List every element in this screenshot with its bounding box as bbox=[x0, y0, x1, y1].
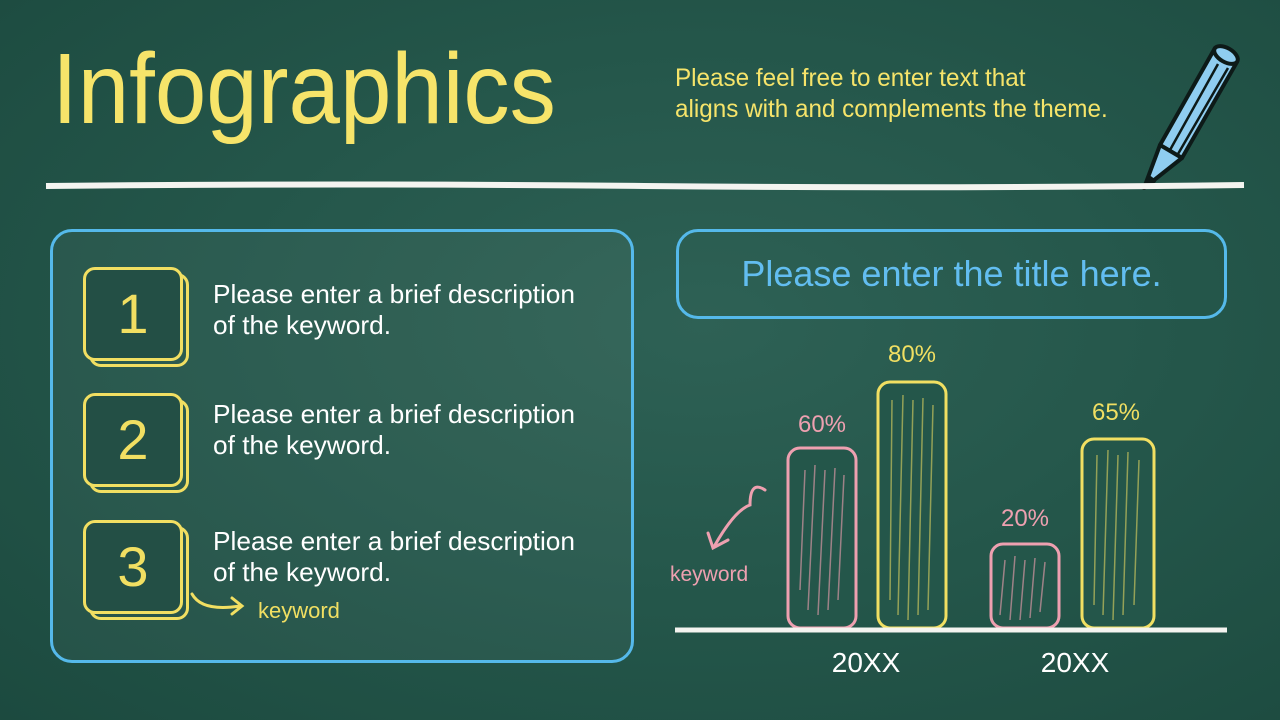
item 1 bbox=[83, 267, 575, 367]
title: Infographics bbox=[52, 33, 556, 145]
bar: 20% bbox=[991, 505, 1059, 628]
x labels: 20XX bbox=[832, 647, 901, 678]
item 1: Please enter a brief description bbox=[213, 279, 575, 309]
arrow: keyword bbox=[708, 487, 765, 548]
item 3: of the keyword. bbox=[213, 557, 391, 587]
bar: 80%: 80% bbox=[888, 341, 936, 368]
subtitle bbox=[675, 64, 1108, 123]
baseline bbox=[675, 628, 1227, 632]
item 3: Please enter a brief description bbox=[213, 526, 575, 556]
x labels: 20XX bbox=[1041, 647, 1110, 678]
item 2: Please enter a brief description bbox=[213, 399, 575, 429]
item 1: 1 bbox=[117, 282, 149, 345]
x labels bbox=[832, 647, 1110, 678]
bar: 65% bbox=[1082, 399, 1154, 628]
bar: 60%: 60% bbox=[798, 411, 846, 438]
item 2 bbox=[83, 393, 575, 493]
item 2: of the keyword. bbox=[213, 430, 391, 460]
chart title box bbox=[676, 229, 1227, 319]
keyword label: keyword bbox=[258, 598, 340, 623]
bar: 65%: 65% bbox=[1092, 399, 1140, 426]
keyword label: keyword bbox=[670, 563, 748, 586]
divider chalk line bbox=[46, 182, 1244, 190]
subtitle: aligns with and complements the theme. bbox=[675, 95, 1108, 123]
subtitle: Please feel free to enter text that bbox=[675, 64, 1025, 92]
bar: 80% bbox=[878, 341, 946, 628]
item 3 bbox=[83, 520, 575, 620]
panel: keywords bbox=[50, 229, 634, 663]
item 3: 3 bbox=[117, 535, 149, 598]
bar: 60% bbox=[788, 411, 856, 628]
chart title box: Please enter the title here. bbox=[741, 253, 1162, 294]
bar chart bbox=[670, 341, 1227, 678]
item 2: 2 bbox=[117, 408, 149, 471]
bar: 20%: 20% bbox=[1001, 505, 1049, 532]
icon: pencil bbox=[1142, 44, 1240, 190]
arrow: keyword bbox=[190, 592, 244, 616]
item 1: of the keyword. bbox=[213, 310, 391, 340]
